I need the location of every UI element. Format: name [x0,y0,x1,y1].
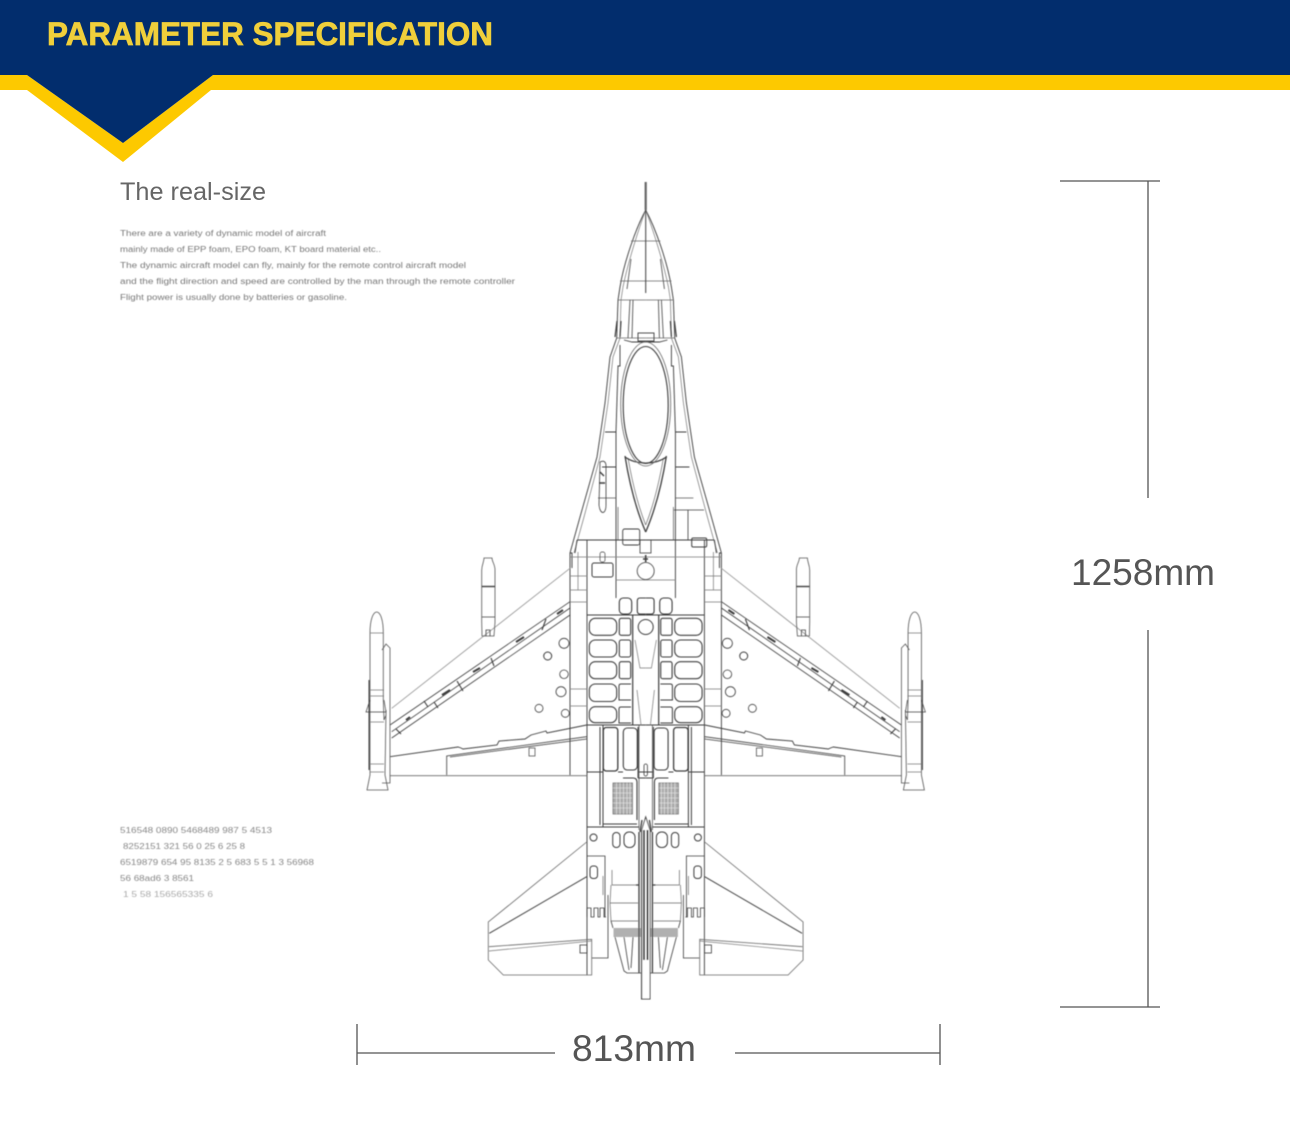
text block: description: There are a variety of dynamic model of aircraft [120,229,327,238]
exhaust core [644,830,648,960]
centre spine lines [639,725,652,830]
text block: number codes [120,826,315,899]
text block: description: The dynamic aircraft model can fly, mainly for the remote control aircraft model [120,261,466,270]
cockpit side box, right [674,510,707,547]
text block: number codes: 8252151 321 56 0 25 6 25 8 [123,842,246,851]
right half of aircraft [646,210,925,999]
text block: description: Flight power is usually done by batteries or gasoline. [120,293,347,302]
nose probe [645,182,647,210]
nose wheel bay [637,540,654,580]
dimension: height 1258mm [1060,181,1215,1007]
text block: number codes: 516548 0890 5468489 987 5 4513 [120,826,273,835]
header banner [0,0,1290,162]
text block: number codes: 1 5 58 156565335 6 [123,890,214,899]
text block: description: mainly made of EPP foam, EPO foam, KT board material etc.. [120,245,381,254]
avionics box, left [592,552,613,577]
text block: description: and the flight direction and speed are controlled by the man through the remote controller [120,277,515,286]
cockpit side box, left [623,529,640,545]
text block: number codes: 6519879 654 95 8135 2 5 683 5 5 1 3 56968 [120,858,315,867]
nose center line [645,210,647,293]
side probe, left only [599,461,606,512]
forward hatch [638,333,654,341]
dimension: width 813mm [357,1024,940,1069]
text block: description [120,229,515,302]
dimension: height 1258mm: 1258mm [1071,552,1215,593]
tail fin [642,817,650,999]
canopy [621,342,671,466]
title: PARAMETER SPECIFICATION [47,16,493,52]
heading: the real-size: The real-size [120,178,266,206]
centre capsule [644,764,647,776]
text block: number codes: 56 68ad6 3 8561 [120,874,195,883]
centre bay circle [638,620,653,634]
dimension: width 813mm: 813mm [572,1028,696,1069]
left half of aircraft [366,210,646,999]
aircraft blueprint [366,182,925,999]
